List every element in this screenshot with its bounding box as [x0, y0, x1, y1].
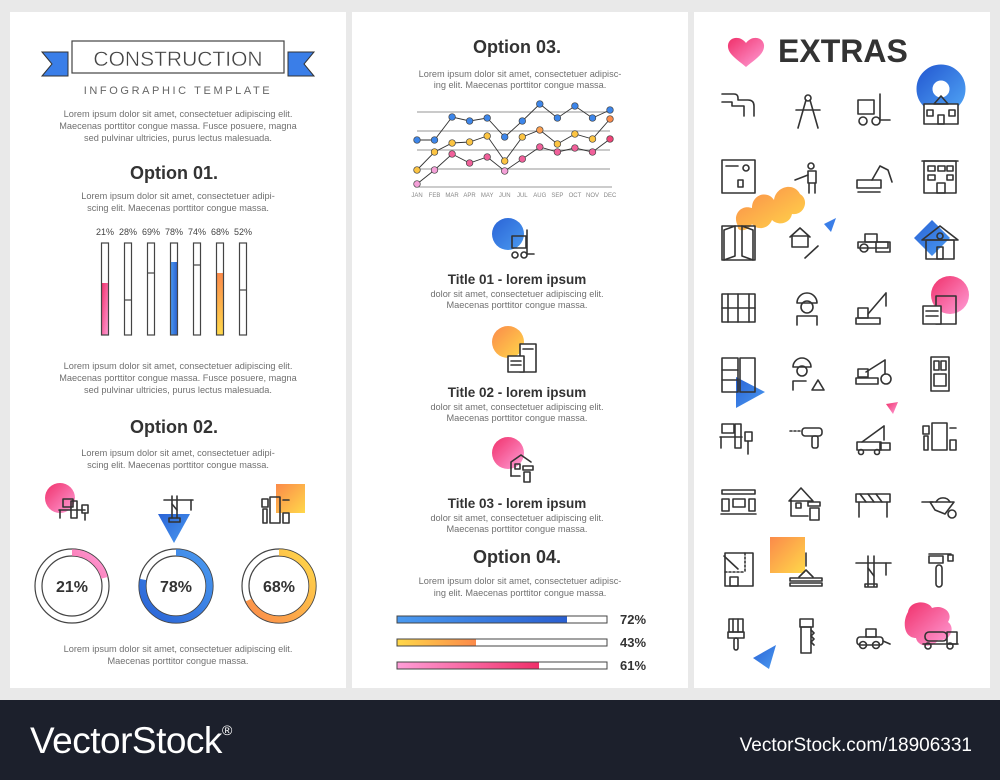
panel: middle: [352, 12, 688, 688]
icon: house painting: [492, 437, 533, 482]
icon: bathroom: [262, 484, 305, 523]
bar chart: vertical bars: 69%: [142, 227, 160, 237]
line chart: APR: [463, 193, 476, 199]
text block: Lorem ipsum dolor sit amet, consectetuer adipiscing elit.: [64, 361, 292, 371]
text block: sed pulvinar ultricies, purus lectus malesuada.: [84, 385, 272, 395]
title banner: [42, 41, 314, 76]
text: option 01: scing elit. Maecenas porttitor congue massa.: [87, 203, 269, 213]
text: option 02: scing elit. Maecenas porttitor congue massa.: [87, 460, 269, 470]
horizontal bars: 61%: [620, 658, 646, 673]
row 5: [722, 358, 755, 392]
text: option 01: [81, 191, 275, 213]
intro text: Maecenas porttitor congue massa. Fusce posuere, magna: [59, 121, 298, 131]
intro text: Lorem ipsum dolor sit amet, consectetuer adipiscing elit.: [64, 109, 292, 119]
item: title 03: Maecenas porttitor congue massa.: [447, 524, 587, 534]
donut chart: 21%: 21%: [56, 579, 88, 596]
item: title 03: [430, 496, 604, 534]
text: option 04: [419, 576, 621, 598]
text block: Maecenas porttitor congue massa. Fusce posuere, magna: [59, 373, 298, 383]
line chart: JUL: [517, 193, 528, 199]
bar chart: vertical bars: 52%: [234, 227, 252, 237]
footer bar: ®: [222, 722, 233, 738]
panel: left: [10, 12, 346, 688]
line chart: FEB: [429, 193, 440, 199]
panel: extras: [694, 12, 990, 688]
donut chart: 68%: [242, 549, 316, 623]
bar chart: vertical bars: [96, 227, 252, 335]
item: title 01: Maecenas porttitor congue massa.: [447, 300, 587, 310]
bar chart: vertical bars: 28%: [119, 227, 137, 237]
row 8: [724, 553, 753, 586]
text: option 03: [419, 69, 621, 90]
text: option 02: [81, 448, 275, 470]
line chart: DEC: [604, 193, 617, 199]
intro text: sed pulvinar ultricies, purus lectus malesuada.: [84, 133, 272, 143]
line chart: JAN: [411, 193, 423, 199]
line chart: AUG: [533, 193, 547, 199]
icon: crane: [158, 496, 193, 543]
donut chart: 21%: [35, 549, 109, 623]
subtitle: INFOGRAPHIC TEMPLATE: [84, 85, 272, 97]
footer bar: VectorStock.com/18906331: [740, 735, 972, 756]
heading: extras: EXTRAS: [778, 33, 908, 69]
icon: buildings: [492, 326, 536, 372]
icon: heart: [728, 38, 764, 67]
row 3: [722, 226, 755, 260]
line chart: OCT: [569, 193, 582, 199]
text: option 01: Lorem ipsum dolor sit amet, consectetuer adipi-: [81, 191, 275, 201]
item: title 01: [430, 272, 604, 310]
donut chart: 78%: 78%: [160, 579, 192, 596]
line chart: NOV: [586, 193, 599, 199]
item: title 02: dolor sit amet, consectetuer adipiscing elit.: [430, 402, 604, 412]
decorations: [736, 72, 969, 669]
donut chart: 68%: 68%: [263, 579, 295, 596]
text: option 04: Lorem ipsum dolor sit amet, consectetuer adipisc-: [419, 576, 621, 586]
item: title 02: Title 02 - lorem ipsum: [448, 385, 586, 400]
row 4: [722, 294, 755, 322]
line chart: JUN: [499, 193, 511, 199]
item: title 03: dolor sit amet, consectetuer adipiscing elit.: [430, 513, 604, 523]
heading: option 01: Option 01.: [130, 163, 218, 183]
icon grid: [720, 94, 958, 653]
horizontal bars: 72%: [620, 612, 646, 627]
line chart: SEP: [551, 193, 563, 199]
line chart: [411, 101, 617, 199]
title banner: CONSTRUCTION: [93, 48, 263, 71]
row 7: [721, 490, 756, 514]
item: title 01: Title 01 - lorem ipsum: [448, 272, 586, 287]
heading: option 02: Option 02.: [130, 417, 218, 437]
footer bar: [0, 700, 1000, 780]
footer text left: Maecenas porttitor congue massa.: [108, 656, 248, 666]
bar chart: vertical bars: 21%: [96, 227, 114, 237]
item: title 01: dolor sit amet, consectetuer adipiscing elit.: [430, 289, 604, 299]
donut chart: 78%: [139, 549, 213, 623]
row 9: [728, 619, 744, 650]
text: option 03: Lorem ipsum dolor sit amet, consectetuer adipisc-: [419, 69, 621, 79]
icon: office desk: [45, 483, 88, 520]
heading: option 03: Option 03.: [473, 37, 561, 57]
footer text left: [64, 644, 292, 666]
icon: forklift: [492, 218, 534, 258]
footer text left: Lorem ipsum dolor sit amet, consectetuer adipiscing elit.: [64, 644, 292, 654]
horizontal bars: 43%: [620, 635, 646, 650]
text: option 03: ing elit. Maecenas porttitor congue massa.: [434, 80, 606, 90]
item: title 02: Maecenas porttitor congue massa.: [447, 413, 587, 423]
bar chart: vertical bars: 78%: [165, 227, 183, 237]
item: title 03: Title 03 - lorem ipsum: [448, 496, 586, 511]
bar chart: vertical bars: 68%: [211, 227, 229, 237]
intro text: [59, 109, 298, 143]
row 6: [720, 424, 752, 454]
text: option 02: Lorem ipsum dolor sit amet, consectetuer adipi-: [81, 448, 275, 458]
line chart: MAR: [445, 193, 459, 199]
row 2: [722, 160, 755, 193]
footer bar: VectorStock: [30, 720, 222, 761]
line chart: MAY: [481, 193, 493, 199]
bar chart: vertical bars: 74%: [188, 227, 206, 237]
text: option 04: ing elit. Maecenas porttitor congue massa.: [434, 588, 606, 598]
row 1: [722, 94, 754, 116]
horizontal bars: [397, 612, 646, 673]
item: title 02: [430, 385, 604, 423]
text block: [59, 361, 298, 395]
heading: option 04: Option 04.: [473, 547, 561, 567]
